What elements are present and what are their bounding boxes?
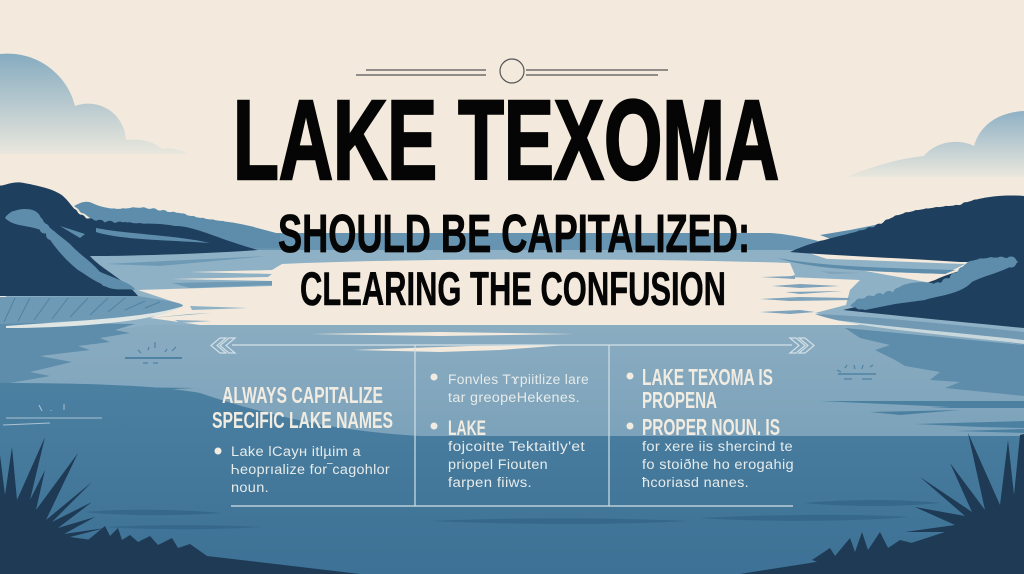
column 2: farpen fiiws. bbox=[448, 475, 532, 490]
column 1: Lake lCayʜ itlµim a bbox=[231, 444, 361, 459]
lower lake deep tone bbox=[0, 383, 1024, 574]
column 1: SPECIFIC LAKE NAMES bbox=[212, 407, 393, 433]
cloud: right bbox=[846, 111, 1024, 177]
title ornament bbox=[356, 59, 668, 83]
cream ripple highlights bbox=[311, 332, 574, 352]
lower dark water streaks bbox=[85, 500, 940, 529]
light water bbox=[0, 250, 1024, 345]
column 2: fojcoitte Tektaitly'et bbox=[448, 439, 585, 454]
water streaks bbox=[120, 387, 1024, 433]
column 3: LAKE TEXOMA IS bbox=[642, 364, 773, 390]
column 2: Fonvles Tɤpiitlize lare bbox=[448, 372, 589, 387]
icon: right ripple sparkle bbox=[837, 365, 876, 379]
icon: left ripple sparkle bbox=[125, 342, 182, 363]
right shore: sandbank bbox=[815, 314, 1024, 345]
column 1 bbox=[212, 382, 393, 495]
right shore: front hill bbox=[790, 195, 1024, 262]
column 1: ALWAYS CAPITALIZE bbox=[222, 382, 383, 408]
column 2: tar ɡreopeHekenes. bbox=[448, 390, 580, 405]
arrow: right chevrons bbox=[790, 338, 814, 353]
column 2: priopel Fiouten bbox=[448, 457, 548, 472]
column 3: fo stoiðhe ho erogahig bbox=[642, 457, 794, 472]
cloud: left bbox=[0, 54, 188, 154]
reflection streaks bbox=[105, 256, 860, 323]
arrow: left chevrons bbox=[211, 338, 235, 353]
lower lake mid tone bbox=[0, 325, 1024, 445]
left dark water reflection bbox=[0, 322, 135, 383]
left shore: back hill bbox=[74, 202, 280, 248]
column 3: PROPENA bbox=[642, 387, 717, 413]
right shore: back hill bbox=[820, 224, 905, 250]
left shore: front hill bbox=[0, 182, 258, 296]
column 1: noun. bbox=[231, 480, 269, 495]
cream lake reflection bbox=[138, 259, 860, 325]
column 2 bbox=[430, 372, 589, 490]
column 1: Ꮒeoprıalize for‾cagohlor bbox=[231, 462, 390, 477]
column 3: for xere iis shercind te bbox=[642, 439, 793, 454]
far shoreline band bbox=[200, 233, 830, 256]
left shore: foliage highlight bbox=[5, 209, 210, 290]
column 3 bbox=[626, 364, 794, 490]
subtitle line 2: CLEARING THE CONFUSION bbox=[300, 262, 726, 315]
right shore: foliage highlight bbox=[850, 258, 1018, 310]
column 3: ħcoriasd nanes. bbox=[642, 475, 749, 490]
column 2: LAKE bbox=[448, 417, 486, 440]
subtitle line 1: SHOULD BE CAPITALIZED: bbox=[278, 204, 750, 264]
column 3: PROPER NOUN. IS bbox=[642, 414, 780, 440]
table frame bbox=[211, 338, 814, 506]
right dark water reflection bbox=[845, 328, 1024, 396]
right shore: water bank bbox=[778, 258, 965, 274]
right shore: lower hill bbox=[843, 258, 1024, 328]
right foreground grass bbox=[740, 433, 1024, 574]
left foreground grass bbox=[0, 437, 360, 574]
icon: left pale ripple lines bbox=[3, 404, 102, 425]
left shore: dock bbox=[0, 296, 183, 328]
